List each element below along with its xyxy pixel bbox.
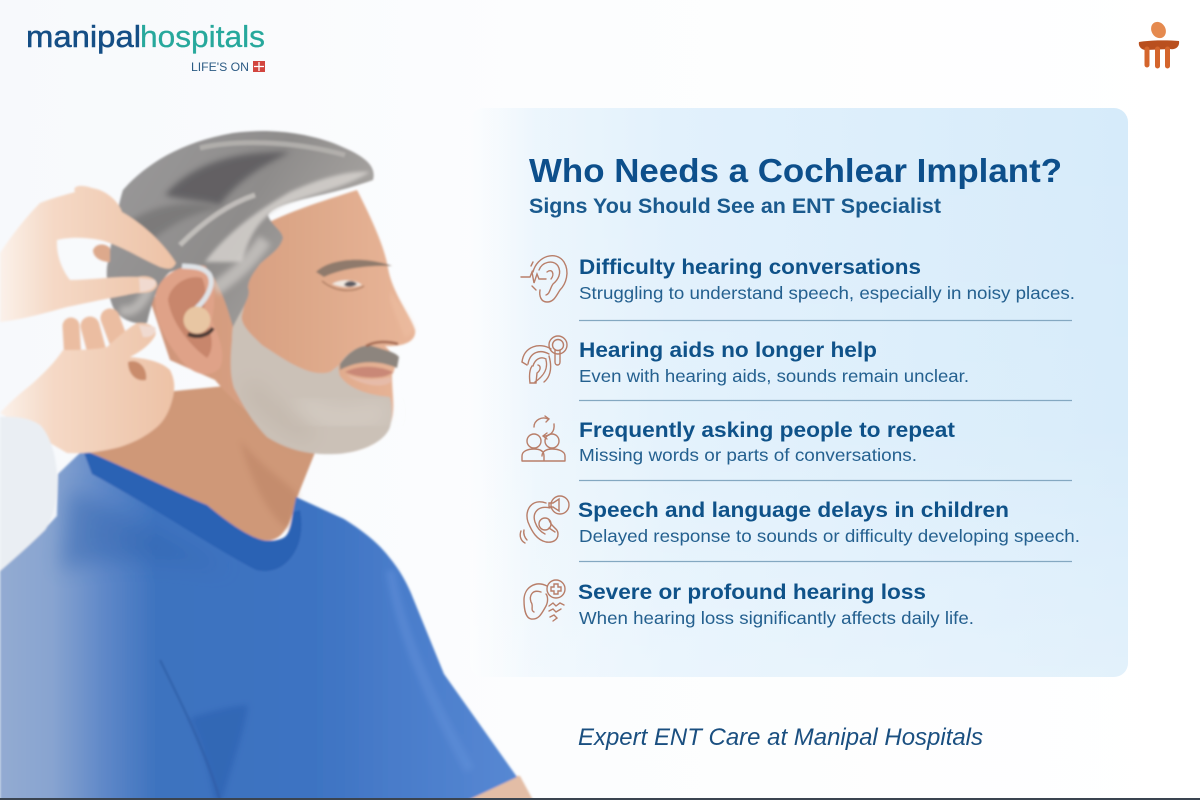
forearm at bottom right [462, 776, 533, 800]
title: Severe or profound hearing loss [578, 581, 926, 604]
sleeve [0, 417, 57, 571]
logo: Manipal Hospitals: LIFE'S ON [191, 60, 249, 74]
arm crease [190, 705, 248, 800]
footer tagline: Expert ENT Care at Manipal Hospitals [578, 724, 983, 751]
sign 5: severe or profound hearing loss [524, 580, 974, 628]
sign 3: frequently asking people to repeat [522, 416, 955, 465]
icon: orange pillar emblem [1139, 19, 1179, 66]
title: Frequently asking people to repeat [579, 419, 955, 442]
description: Delayed response to sounds or difficulty developing speech. [579, 526, 1080, 546]
logo: Manipal Hospitals: manipal [26, 19, 141, 54]
icon: ear with sound wave [521, 256, 567, 302]
upper hand [0, 186, 176, 322]
nose shadow [366, 342, 398, 346]
collar [83, 450, 302, 571]
moustache [340, 346, 399, 370]
title: Difficulty hearing conversations [579, 256, 921, 279]
photo: man being fitted with a hearing aid [0, 131, 533, 800]
ear [155, 265, 222, 374]
description: Missing words or parts of conversations. [579, 445, 917, 465]
logo: Manipal Hospitals [26, 19, 265, 74]
panel: signs background [470, 108, 1128, 677]
heading: Who Needs a Cochlear Implant? [529, 152, 1062, 189]
hearing aid [182, 266, 211, 312]
face [150, 190, 415, 453]
icon: two people with repeat arrows [522, 416, 565, 461]
beard [231, 290, 392, 454]
sign 2: hearing aids no longer help [522, 336, 969, 386]
heading [529, 152, 1062, 218]
description: When hearing loss significantly affects daily life. [579, 608, 974, 628]
eye and brow [316, 260, 392, 277]
title: Hearing aids no longer help [579, 339, 877, 362]
logo: Manipal Hospitals: hospitals [140, 19, 265, 54]
icon: ear with plus [524, 580, 565, 621]
hair [107, 131, 374, 327]
shirt [0, 450, 517, 800]
description: Struggling to understand speech, especially in noisy places. [579, 283, 1075, 303]
title: Speech and language delays in children [578, 499, 1009, 522]
lower hand [71, 318, 122, 360]
sign 1: difficulty hearing conversations [521, 256, 1075, 303]
description: Even with hearing aids, sounds remain unclear. [579, 366, 969, 386]
icon: ear with speaker [520, 496, 569, 543]
neck [83, 385, 320, 540]
icon: ear with hearing aid [522, 336, 567, 383]
subheading: Signs You Should See an ENT Specialist [529, 195, 941, 218]
lips [345, 367, 393, 378]
sign 4: speech and language delays in children [520, 496, 1080, 546]
